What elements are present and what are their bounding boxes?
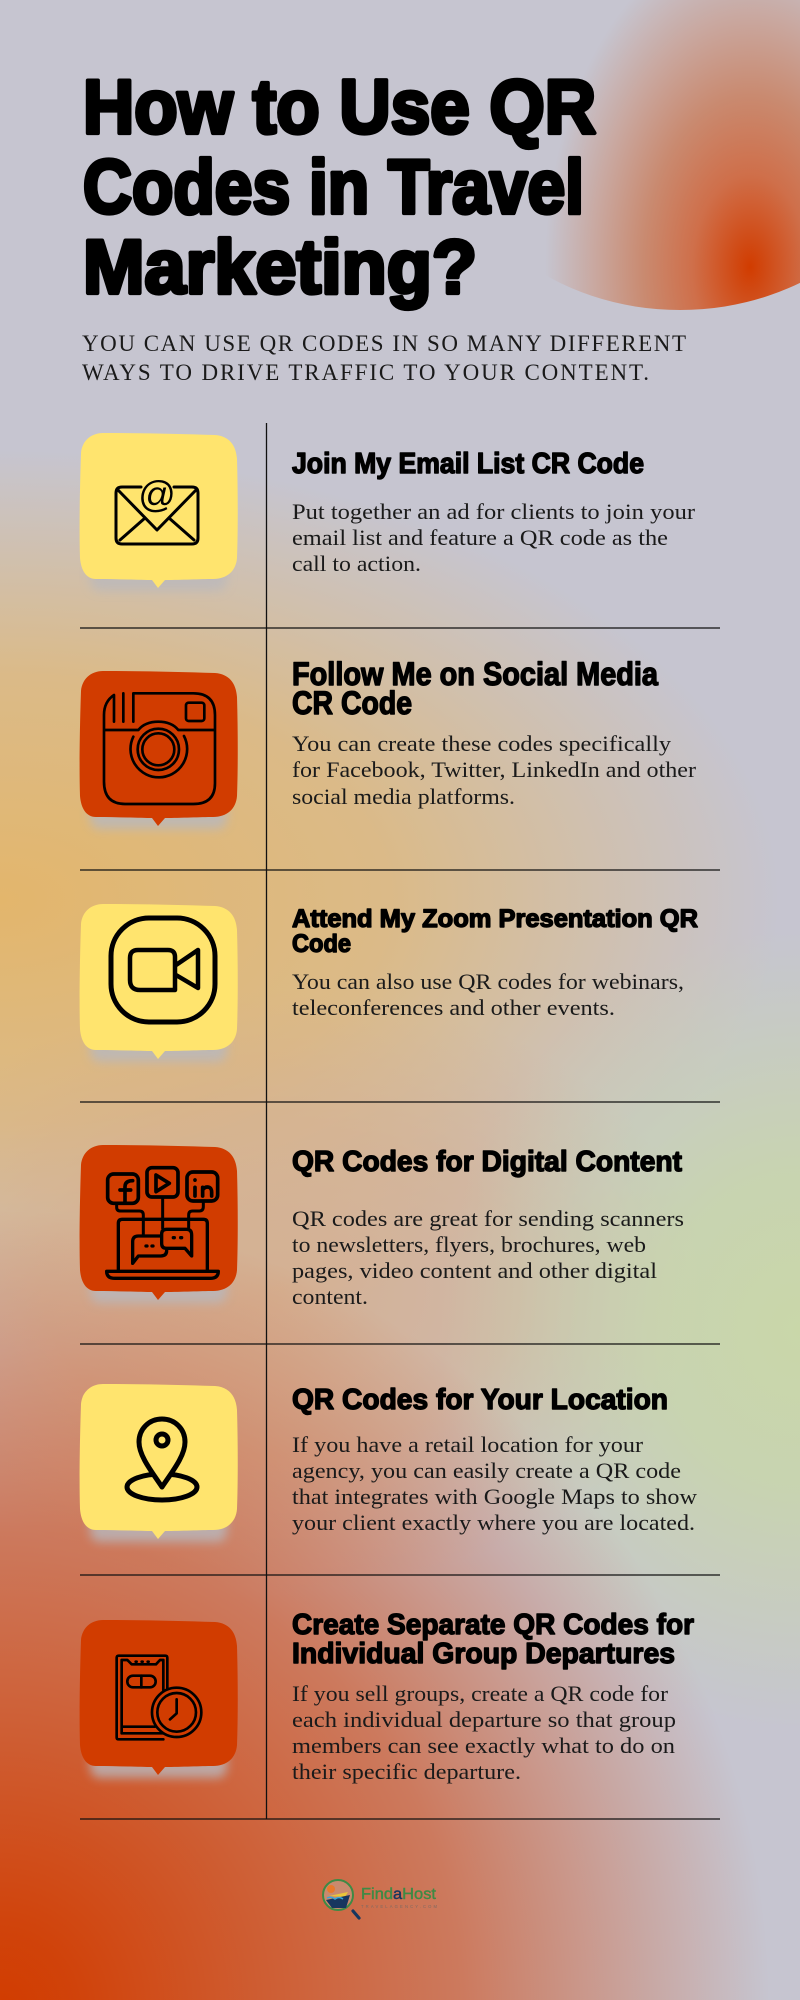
icon: magnifier with ship	[323, 1880, 359, 1918]
body text: that integrates with Google Maps to show	[292, 1484, 698, 1509]
heading: CR Code	[292, 685, 412, 721]
heading	[292, 905, 698, 958]
body text: If you sell groups, create a QR code for	[292, 1681, 669, 1706]
body text: If you have a retail location for your	[292, 1432, 644, 1457]
icon: envelope in yellow bubble	[80, 433, 238, 591]
icon: camera in red bubble	[80, 671, 238, 829]
heading: QR Codes for Your Location	[292, 1384, 668, 1416]
body text	[292, 731, 697, 809]
grid lines	[80, 423, 720, 1819]
body text: You can create these codes specifically	[292, 731, 672, 756]
body text: Put together an ad for clients to join your	[292, 499, 696, 524]
panel: group departures	[80, 1609, 694, 1784]
body text: You can also use QR codes for webinars,	[292, 969, 684, 994]
panel: location	[80, 1384, 698, 1542]
icon: social laptop in red bubble	[80, 1145, 238, 1303]
title: Codes in Travel	[83, 145, 584, 230]
heading	[292, 1609, 694, 1670]
body text: content.	[292, 1284, 368, 1309]
subtitle	[82, 331, 686, 385]
body text: to newsletters, flyers, brochures, web	[292, 1232, 646, 1257]
icon: video camera in yellow bubble	[80, 904, 238, 1062]
heading: Attend My Zoom Presentation QR	[292, 905, 698, 933]
icon: map pin in yellow bubble	[80, 1384, 238, 1542]
subtitle: WAYS TO DRIVE TRAFFIC TO YOUR CONTENT.	[82, 360, 649, 385]
panel: digital content	[80, 1145, 684, 1309]
logo: FindaHost: TRAVELAGENCY.COM	[361, 1904, 438, 1909]
title: Marketing?	[83, 225, 477, 310]
heading	[292, 656, 658, 721]
body text	[292, 1432, 698, 1535]
panel: zoom presentation	[80, 904, 698, 1062]
body text	[292, 499, 696, 576]
body text: pages, video content and other digital	[292, 1258, 657, 1283]
title	[83, 65, 596, 310]
body text	[292, 1206, 684, 1309]
body text: each individual departure so that group	[292, 1707, 676, 1732]
body text: email list and feature a QR code as the	[292, 525, 668, 550]
body text: your client exactly where you are located.	[292, 1510, 695, 1535]
title: How to Use QR	[83, 65, 596, 150]
logo: FindaHost	[323, 1880, 438, 1918]
icon: phone and clock in red bubble	[80, 1620, 238, 1778]
body text	[292, 1681, 676, 1784]
heading: Join My Email List CR Code	[292, 448, 644, 480]
heading: Code	[292, 930, 351, 958]
body text: members can see exactly what to do on	[292, 1733, 675, 1758]
panel: email list	[80, 433, 696, 591]
body text: for Facebook, Twitter, LinkedIn and other	[292, 757, 697, 782]
icon: envelope in yellow bubble: @	[138, 474, 176, 515]
body text: call to action.	[292, 551, 421, 576]
panel: social media	[80, 656, 697, 829]
body text: social media platforms.	[292, 784, 515, 809]
heading: Individual Group Departures	[292, 1638, 675, 1670]
body text: their specific departure.	[292, 1759, 521, 1784]
heading: Follow Me on Social Media	[292, 656, 658, 692]
body text: agency, you can easily create a QR code	[292, 1458, 681, 1483]
body text: QR codes are great for sending scanners	[292, 1206, 684, 1231]
body text: teleconferences and other events.	[292, 995, 615, 1020]
heading: QR Codes for Digital Content	[292, 1146, 682, 1178]
body text	[292, 969, 684, 1020]
subtitle: YOU CAN USE QR CODES IN SO MANY DIFFERENT	[82, 331, 686, 356]
logo: FindaHost: FindaHost	[361, 1886, 437, 1903]
heading: Create Separate QR Codes for	[292, 1609, 694, 1641]
